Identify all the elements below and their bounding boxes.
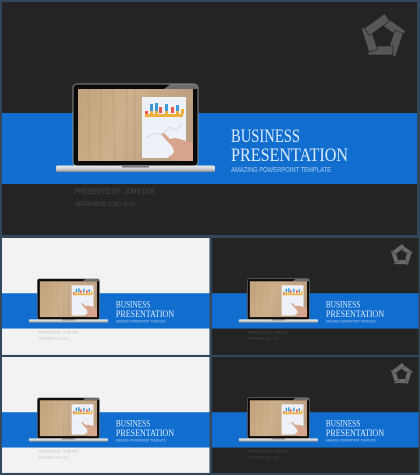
panel: dark slide, bottom right	[212, 357, 418, 473]
presenter details	[38, 330, 78, 340]
panel: light slide, bottom left	[2, 357, 209, 473]
title	[116, 419, 174, 438]
title: PRESENTATION	[326, 428, 384, 438]
presenter details: PRESENTED BY : JOHN DOE	[75, 187, 155, 196]
presenter details: SEPTEMBER 22ND, 2015	[248, 336, 278, 340]
icon: laptop	[29, 279, 108, 323]
icon: pentagon logo	[386, 241, 416, 271]
subtitle: AMAZING POWERPOINT TEMPLATE	[326, 439, 376, 443]
subtitle: AMAZING POWERPOINT TEMPLATE	[326, 320, 376, 324]
icon: pentagon logo	[351, 8, 412, 69]
title: PRESENTATION	[231, 146, 348, 166]
title: BUSINESS	[116, 419, 150, 429]
presenter details: PRESENTED BY : JOHN DOE	[38, 330, 78, 335]
icon: pentagon logo	[386, 360, 416, 390]
panel: dark slide, top right	[212, 238, 418, 355]
title: PRESENTATION	[116, 428, 174, 438]
panel: main dark slide	[2, 2, 417, 235]
panel: light slide, top left	[2, 238, 209, 355]
title: PRESENTATION	[116, 309, 174, 319]
presenter details: PRESENTED BY : JOHN DOE	[248, 330, 288, 335]
icon: laptop	[239, 398, 318, 442]
title: BUSINESS	[231, 127, 300, 147]
blue band	[2, 113, 417, 184]
icon: laptop with chart	[56, 84, 215, 172]
presenter details: SEPTEMBER 22ND, 2015	[38, 455, 68, 459]
presenter details	[248, 449, 288, 459]
presenter details: PRESENTED BY : JOHN DOE	[248, 449, 288, 454]
title: BUSINESS	[326, 300, 360, 310]
presenter details	[38, 449, 78, 459]
title	[116, 300, 174, 319]
presenter details: SEPTEMBER 22ND, 2015	[75, 202, 136, 208]
title	[326, 300, 384, 319]
presenter details: SEPTEMBER 22ND, 2015	[38, 336, 68, 340]
icon: laptop	[239, 279, 318, 323]
icon: laptop	[29, 398, 108, 442]
subtitle: AMAZING POWERPOINT TEMPLATE	[116, 439, 166, 443]
title: BUSINESS	[326, 419, 360, 429]
presenter details: PRESENTED BY : JOHN DOE	[38, 449, 78, 454]
subtitle: AMAZING POWERPOINT TEMPLATE	[231, 167, 331, 174]
presenter details: SEPTEMBER 22ND, 2015	[248, 455, 278, 459]
title	[231, 127, 348, 166]
title: BUSINESS	[116, 300, 150, 310]
subtitle: AMAZING POWERPOINT TEMPLATE	[116, 320, 166, 324]
presenter details	[75, 187, 155, 208]
title: PRESENTATION	[326, 309, 384, 319]
presenter details	[248, 330, 288, 340]
title	[326, 419, 384, 438]
